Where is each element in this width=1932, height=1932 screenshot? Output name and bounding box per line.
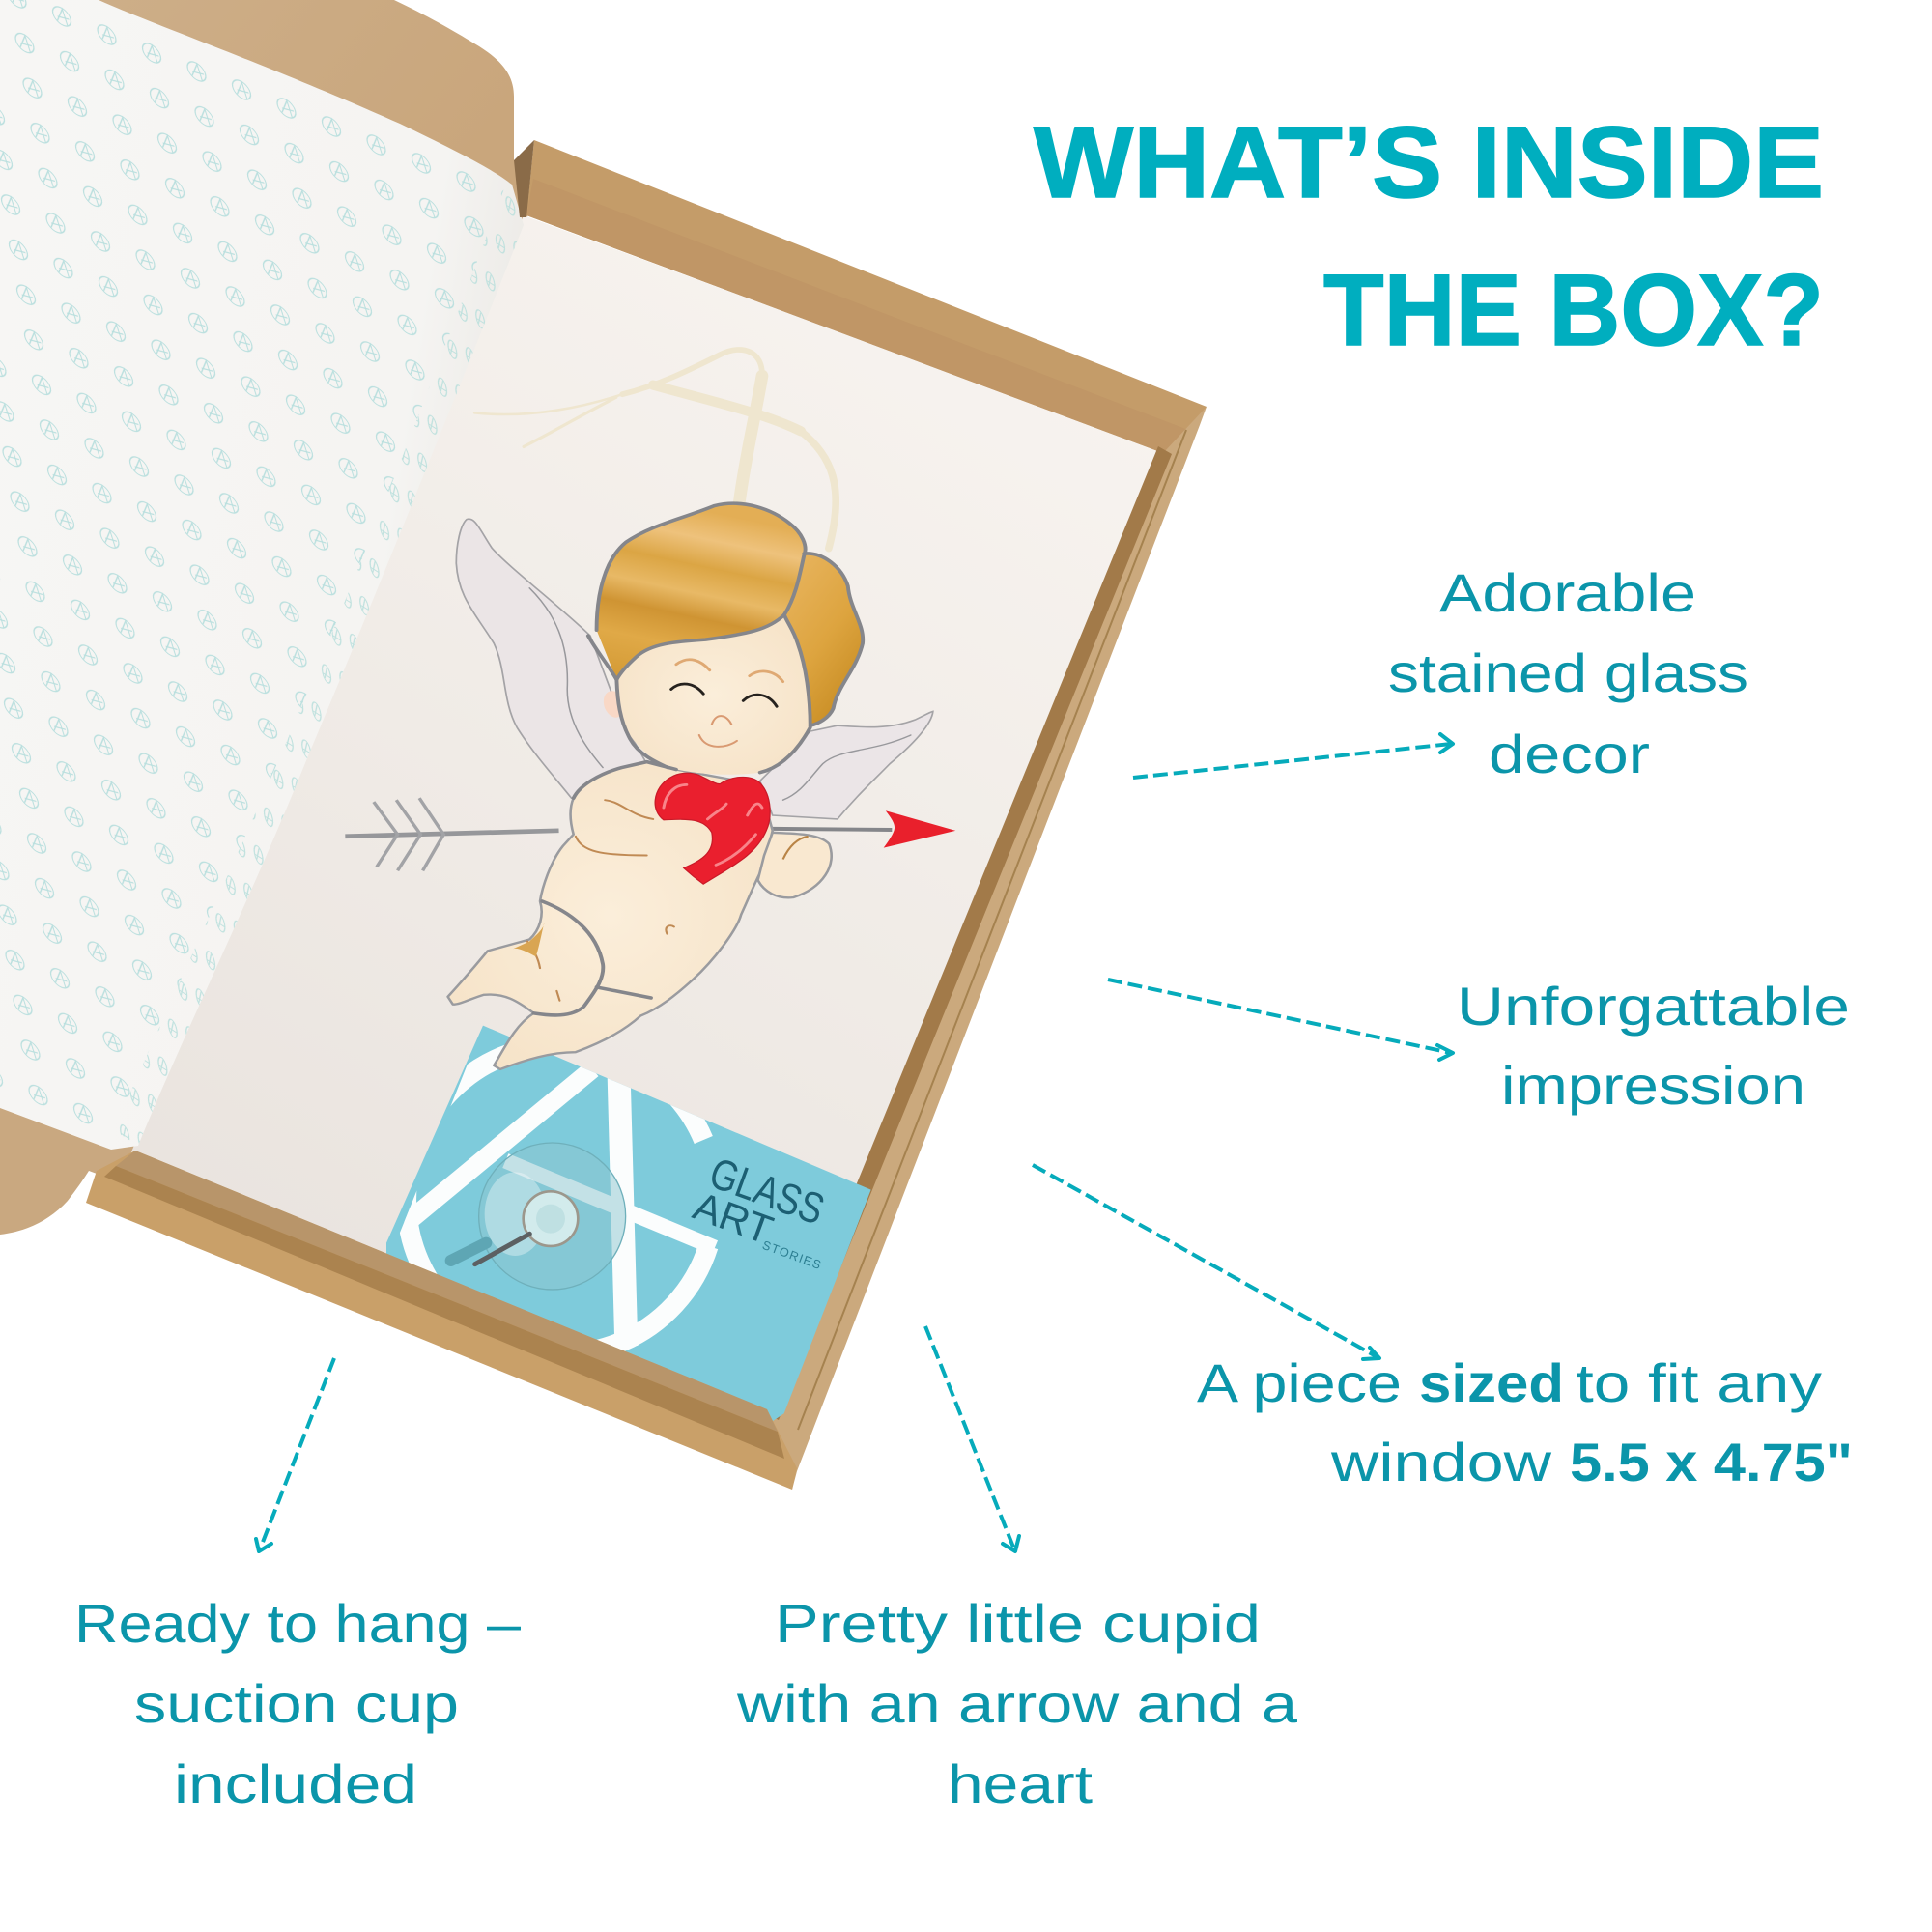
right wall crease bbox=[798, 430, 1186, 1430]
logo text bbox=[688, 1148, 831, 1272]
right wall dark inner strip bbox=[763, 446, 1172, 1420]
arrow shaft bbox=[345, 798, 892, 870]
hair front bbox=[597, 503, 806, 680]
box bottom wall bbox=[86, 1151, 797, 1490]
shoulder lead line bbox=[574, 762, 676, 798]
callout: Adorable stained glass decor: decor bbox=[1489, 724, 1650, 784]
GLASS wordmark: GLASS bbox=[703, 1148, 831, 1235]
top wall notch bbox=[514, 140, 534, 217]
body and legs bbox=[448, 762, 773, 1069]
card white logo mark bbox=[406, 1045, 715, 1354]
callout: Pretty little cupid bbox=[736, 1593, 1298, 1814]
arrow: to Pretty little cupid bbox=[925, 1326, 1019, 1551]
callout: A piece sized to fit any window: window bbox=[1330, 1432, 1552, 1492]
wing right bbox=[760, 711, 933, 819]
callout: Ready to hang: Ready to hang – bbox=[74, 1593, 522, 1654]
callout: Adorable stained glass decor bbox=[1388, 562, 1748, 784]
photo: open kraft box bbox=[0, 0, 1207, 1490]
far hand bbox=[758, 833, 832, 897]
top wall shaded band bbox=[526, 179, 1188, 456]
product: stained glass cupid bbox=[345, 503, 955, 1069]
face bbox=[616, 614, 810, 775]
callout: Pretty little cupid: heart bbox=[948, 1753, 1094, 1814]
callout: Pretty little cupid: Pretty little cupid bbox=[775, 1593, 1261, 1654]
callout: Unforgattable impression: Unforgattable bbox=[1457, 976, 1850, 1037]
hand crease bbox=[783, 837, 809, 859]
ear bbox=[604, 691, 619, 718]
callout: A piece sized to fit any window: 5.5 x 4.75" bbox=[1570, 1432, 1853, 1492]
callout: Adorable stained glass decor: stained glass bbox=[1388, 642, 1748, 703]
face features bbox=[671, 660, 783, 747]
callout: A piece sized to fit any window: A piece bbox=[1197, 1352, 1402, 1413]
callout: Pretty little cupid: with an arrow and a bbox=[736, 1673, 1298, 1734]
arrow: to A piece sized bbox=[1033, 1165, 1379, 1359]
ART wordmark: ART bbox=[688, 1182, 779, 1253]
box lower-left flap bbox=[0, 1092, 145, 1235]
callout: Ready to hang bbox=[74, 1593, 522, 1814]
title line 2: THE BOX? bbox=[1323, 254, 1824, 367]
callout: A piece sized to fit any window bbox=[1197, 1352, 1853, 1492]
wing right inner line bbox=[783, 735, 911, 800]
red heart bbox=[655, 773, 770, 884]
box right wall bbox=[763, 407, 1207, 1490]
callout: Ready to hang: suction cup bbox=[134, 1673, 459, 1734]
box top flap bbox=[99, 0, 530, 232]
suction cup bbox=[451, 1143, 626, 1290]
tissue sheet bbox=[0, 0, 524, 1150]
tissue fold strip bbox=[114, 185, 524, 1146]
body details bbox=[513, 800, 674, 1015]
card base bbox=[386, 1026, 871, 1442]
tissue logo pattern bbox=[0, 0, 504, 1130]
callout: Unforgattable impression bbox=[1457, 976, 1850, 1116]
callout: A piece sized to fit any window: to fit any bbox=[1576, 1352, 1822, 1413]
callout: Unforgattable impression: impression bbox=[1501, 1055, 1805, 1116]
title line 1: WHAT’S INSIDE bbox=[1034, 106, 1824, 219]
arrow: to Adorable stained glass decor bbox=[1133, 734, 1453, 778]
box top wall bbox=[526, 140, 1207, 456]
arrow: to Unforgattable impression bbox=[1108, 980, 1453, 1060]
title bbox=[1034, 106, 1824, 367]
business card bbox=[386, 1026, 871, 1442]
wing left inner line bbox=[529, 588, 603, 768]
hair back bbox=[784, 554, 863, 725]
tissue paper with logo pattern bbox=[0, 0, 524, 1150]
STORIES wordmark: STORIES bbox=[760, 1238, 823, 1272]
ribbon bbox=[474, 350, 836, 549]
wing left bbox=[456, 519, 647, 798]
arrow: to Ready to hang bbox=[256, 1358, 334, 1551]
hair and face lead lines bbox=[588, 503, 863, 773]
callout: Adorable stained glass decor: Adorable bbox=[1439, 562, 1696, 623]
callout: Ready to hang: included bbox=[174, 1753, 417, 1814]
foam insert bbox=[130, 215, 1164, 1420]
callout: A piece sized to fit any window: sized bbox=[1419, 1352, 1564, 1413]
red arrow head bbox=[884, 810, 955, 848]
